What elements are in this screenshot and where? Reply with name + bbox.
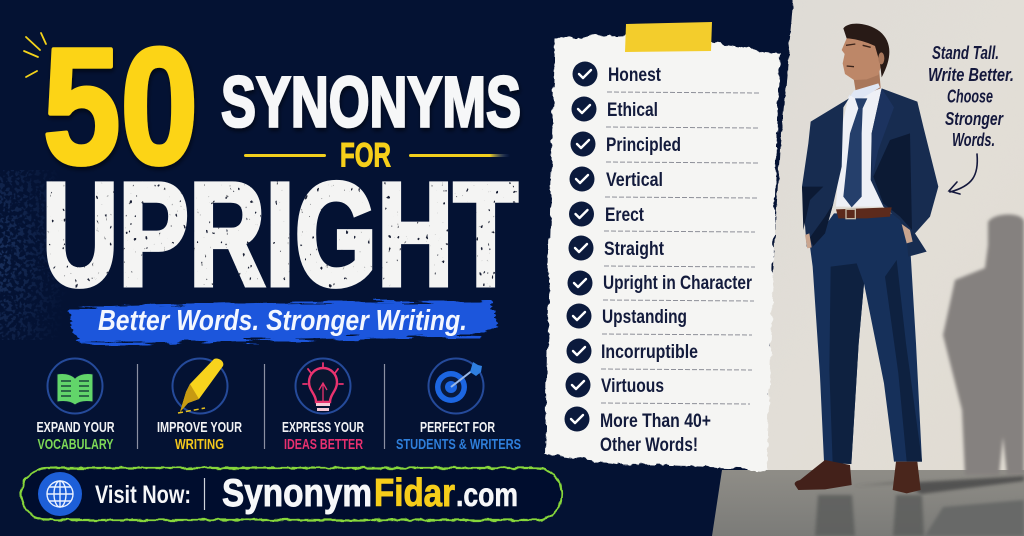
website pill [21,468,562,520]
visit now label: Visit Now: [95,481,191,509]
check marks [571,70,591,423]
caption: stand tall [928,43,1014,150]
synonym words: Upstanding [602,307,687,328]
man in navy suit [795,24,938,493]
synonym words: Upright in Character [603,273,752,294]
synonym words: Other Words! [600,435,698,456]
shirt [836,87,883,207]
man's wall shadow [943,214,1024,475]
dashed rules [601,92,760,404]
caption: stand tall: Choose [947,86,993,106]
divider [204,478,206,510]
collar [848,83,880,101]
synonym words: Erect [605,205,645,226]
benefit label: writing: IMPROVE YOUR [157,419,242,436]
caption: stand tall: Words. [952,130,995,150]
benefit label: students: PERFECT FOR [420,419,495,436]
lapel highlight [872,88,894,177]
heading number 50: 50 [43,14,198,198]
hair [843,24,889,77]
belt [836,207,892,218]
synonym words: Ethical [607,100,658,121]
face [842,36,883,80]
benefit label: ideas: EXPRESS YOUR [282,419,364,436]
website address [222,472,518,515]
jacket dark panels [802,133,912,246]
synonym words: More Than 40+ [600,411,711,432]
neck [853,72,881,97]
icon: pen [172,358,228,414]
floor [712,470,1024,536]
benefit label: writing [157,419,242,453]
benefit label: students [396,419,521,453]
icon: light bulb [296,358,350,414]
trousers [810,213,922,464]
eyebrows and mouth [846,44,871,67]
icon: book [48,358,102,414]
heading word upright: UPRIGHT [42,153,518,317]
benefit label: ideas: IDEAS BETTER [284,436,363,453]
website address: Synonym [222,472,372,515]
synonym words: Honest [608,65,662,86]
heading word synonyms: SYNONYMS [221,64,521,142]
website address: Fidar [374,472,455,515]
floor shadow band [853,476,1024,494]
synonym words: Vertical [606,170,663,191]
benefits row [36,358,521,453]
tagline banner [68,301,498,344]
blue grain texture [0,170,54,340]
title [24,14,521,317]
caption: stand tall: Stand Tall. [932,43,999,63]
benefit label: vocabulary: VOCABULARY [38,436,114,453]
icon: target [428,358,484,414]
left shoe [795,460,852,490]
benefit label: ideas [282,419,364,453]
rule right [409,154,510,157]
panel: synonym list paper [545,22,780,470]
benefit label: vocabulary [36,419,115,453]
photo panel [712,0,1024,536]
synonym words: Virtuous [601,376,664,397]
torn paper [545,34,780,470]
right shoe [893,462,921,493]
benefit label: students: STUDENTS & WRITERS [396,436,521,453]
yellow tape [625,22,712,52]
synonym words: Principled [606,135,681,156]
check icons [564,62,598,432]
synonym words: Incorruptible [601,342,698,363]
icon: globe [38,472,82,516]
belt buckle [846,209,855,219]
dividers [138,364,384,449]
tagline text: Better Words. Stronger Writing. [98,305,467,337]
caption: stand tall: Stronger [945,109,1004,129]
heading word for: FOR [340,136,391,174]
synonym words: Straight [604,239,665,260]
sparks [24,33,46,77]
benefit label: writing: WRITING [175,436,224,453]
hands [805,224,913,248]
tie [843,98,867,207]
trouser shading [829,260,922,464]
jacket left [802,98,849,248]
blue brush stroke [68,301,498,344]
floor dark patch [925,500,1024,536]
jacket right [871,88,938,257]
arrow to man [949,154,977,194]
website address: .com [456,476,518,513]
green scratchy outline [21,468,562,520]
wall [764,0,1024,480]
synonym words [600,65,752,456]
ear [878,52,884,64]
floor reflection [815,495,924,536]
rule left [244,154,326,157]
benefit label: vocabulary: EXPAND YOUR [36,419,115,436]
